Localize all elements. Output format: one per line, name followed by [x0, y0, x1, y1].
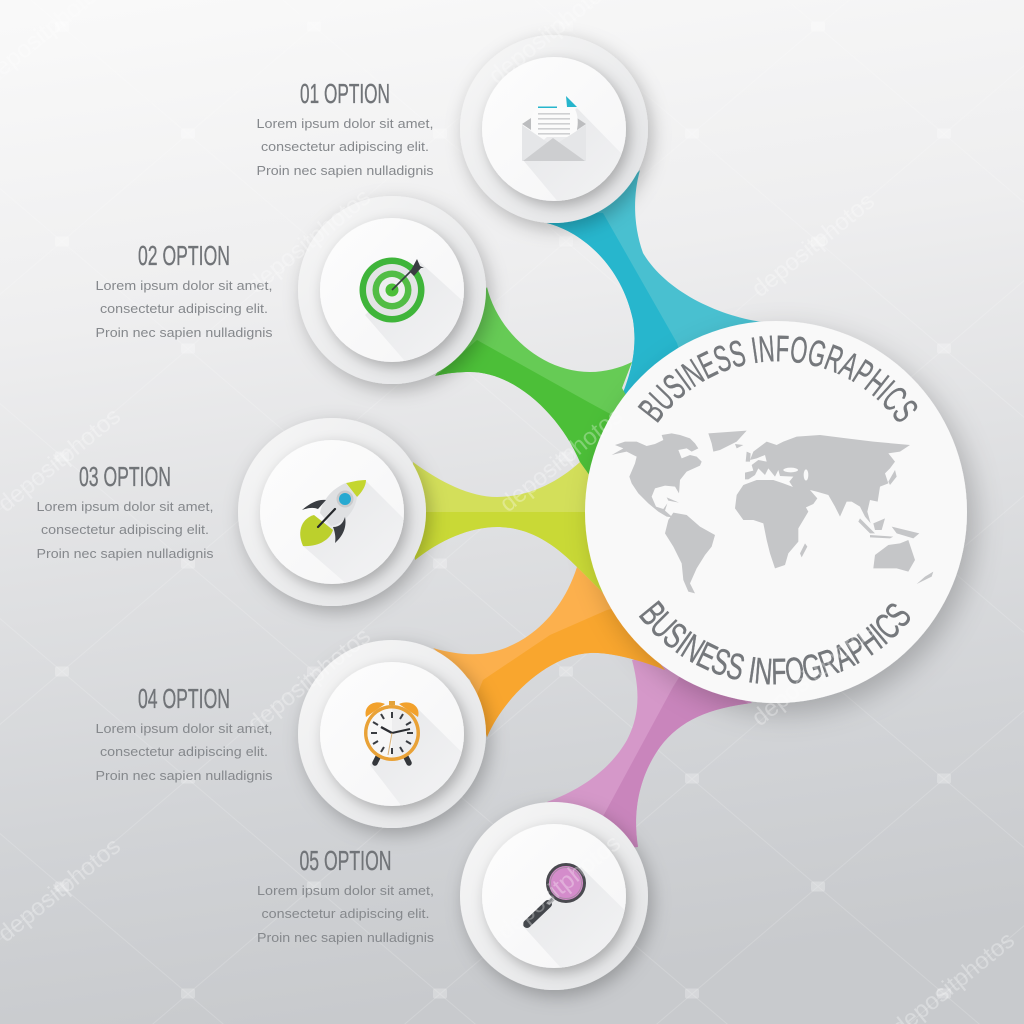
watermarks: depositphotos	[747, 188, 880, 303]
watermarks: depositphotos	[747, 617, 880, 732]
connector: green	[435, 287, 632, 474]
option 3 disc with rocket icon	[238, 418, 440, 606]
connector: purple	[547, 660, 752, 848]
watermarks: depositphotos	[243, 623, 376, 738]
text block: option 1: Lorem ipsum dolor sit amet,	[256, 116, 434, 131]
text block: option 3	[36, 461, 214, 561]
text block: option 2: Proin nec sapien nulladignis	[96, 325, 273, 340]
text block: option 2	[96, 240, 273, 340]
icon: envelope	[522, 96, 586, 161]
text block: option 3: 03 OPTION	[79, 461, 171, 492]
option 1 disc with envelope icon	[460, 35, 660, 240]
text block: option 3: Lorem ipsum dolor sit amet,	[36, 499, 214, 514]
text block: option 4: 04 OPTION	[138, 683, 230, 714]
connector: teal	[547, 170, 761, 394]
text block: option 5	[257, 845, 435, 945]
option 2 disc with target icon	[298, 196, 500, 390]
text block: option 1: 01 OPTION	[300, 78, 390, 109]
text block: option 5: 05 OPTION	[300, 845, 392, 876]
main circle	[580, 318, 988, 725]
text block: option 4	[96, 683, 273, 783]
text block: option 2: 02 OPTION	[138, 240, 230, 271]
world map	[612, 431, 933, 593]
curved title bottom: BUSINESS INFOGRAPHICS	[638, 600, 910, 684]
icon: alarm clock	[364, 701, 420, 763]
curved title top: BUSINESS INFOGRAPHICS	[638, 336, 918, 423]
icon: rocket	[300, 480, 366, 546]
watermarks: depositphotos	[493, 830, 626, 945]
text block: option 2: Lorem ipsum dolor sit amet,	[96, 278, 272, 293]
text block: option 3: consectetur adipiscing elit.	[41, 522, 209, 537]
text block: option 3: Proin nec sapien nulladignis	[36, 546, 214, 561]
text block: option 1	[256, 78, 434, 178]
text block: option 5: Lorem ipsum dolor sit amet,	[257, 883, 434, 898]
connector: lime	[413, 462, 604, 594]
text block: option 1: consectetur adipiscing elit.	[261, 139, 429, 154]
watermarks: depositphotos	[243, 184, 376, 299]
option 5 disc with magnifier icon	[460, 802, 660, 1000]
icon: magnifier	[527, 864, 584, 924]
text block: option 5: consectetur adipiscing elit.	[262, 906, 430, 921]
connector: orange	[433, 567, 665, 737]
option 4 disc with alarm clock icon	[298, 640, 490, 830]
icon: target	[360, 258, 424, 322]
watermarks: depositphotos	[495, 403, 628, 518]
text block: option 5: Proin nec sapien nulladignis	[257, 930, 435, 945]
text block: option 1: Proin nec sapien nulladignis	[256, 163, 434, 178]
text block: option 4: Proin nec sapien nulladignis	[96, 768, 273, 783]
text block: option 2: consectetur adipiscing elit.	[100, 301, 268, 316]
text block: option 4: consectetur adipiscing elit.	[100, 744, 268, 759]
text block: option 4: Lorem ipsum dolor sit amet,	[96, 721, 272, 736]
